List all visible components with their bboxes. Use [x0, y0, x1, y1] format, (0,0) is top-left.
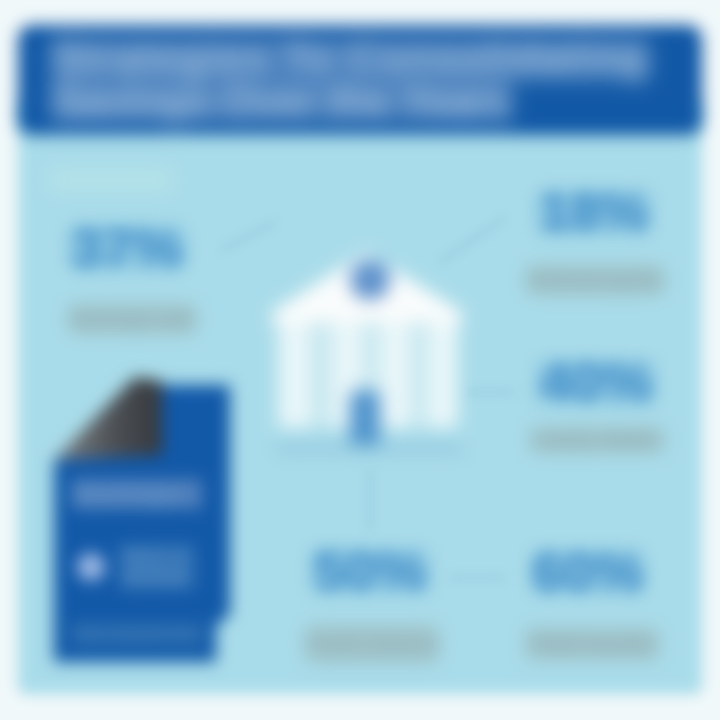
bullet dot	[77, 553, 105, 581]
card footnote: Plan ahead now	[72, 624, 200, 643]
heading: title: Strategies To Consolidating	[51, 34, 648, 82]
heading: title: Savings Over the Years	[51, 77, 511, 125]
stat: middle right	[524, 352, 670, 460]
label: bottom right: Total assets	[529, 631, 655, 656]
label: middle right: Lower debts	[532, 427, 662, 452]
columns	[278, 322, 458, 428]
icon: bank building	[264, 250, 471, 458]
label: bottom middle: Fund returns	[305, 631, 439, 656]
stat: top left	[62, 217, 202, 341]
stat: bottom middle	[298, 540, 446, 670]
stat: bottom right	[518, 542, 665, 667]
label: top left: Savings rate	[68, 306, 196, 331]
label: bottom middle	[305, 625, 439, 663]
card body	[42, 366, 242, 674]
stat: top right	[520, 182, 670, 302]
folded corner	[54, 377, 162, 460]
roof	[272, 252, 462, 324]
panel: light blue background	[18, 100, 702, 694]
base	[276, 444, 462, 452]
emblem	[350, 260, 390, 300]
panel: blue document card	[42, 366, 242, 674]
panel: title banner	[18, 25, 702, 135]
heading: title	[38, 24, 662, 137]
door	[350, 390, 380, 448]
